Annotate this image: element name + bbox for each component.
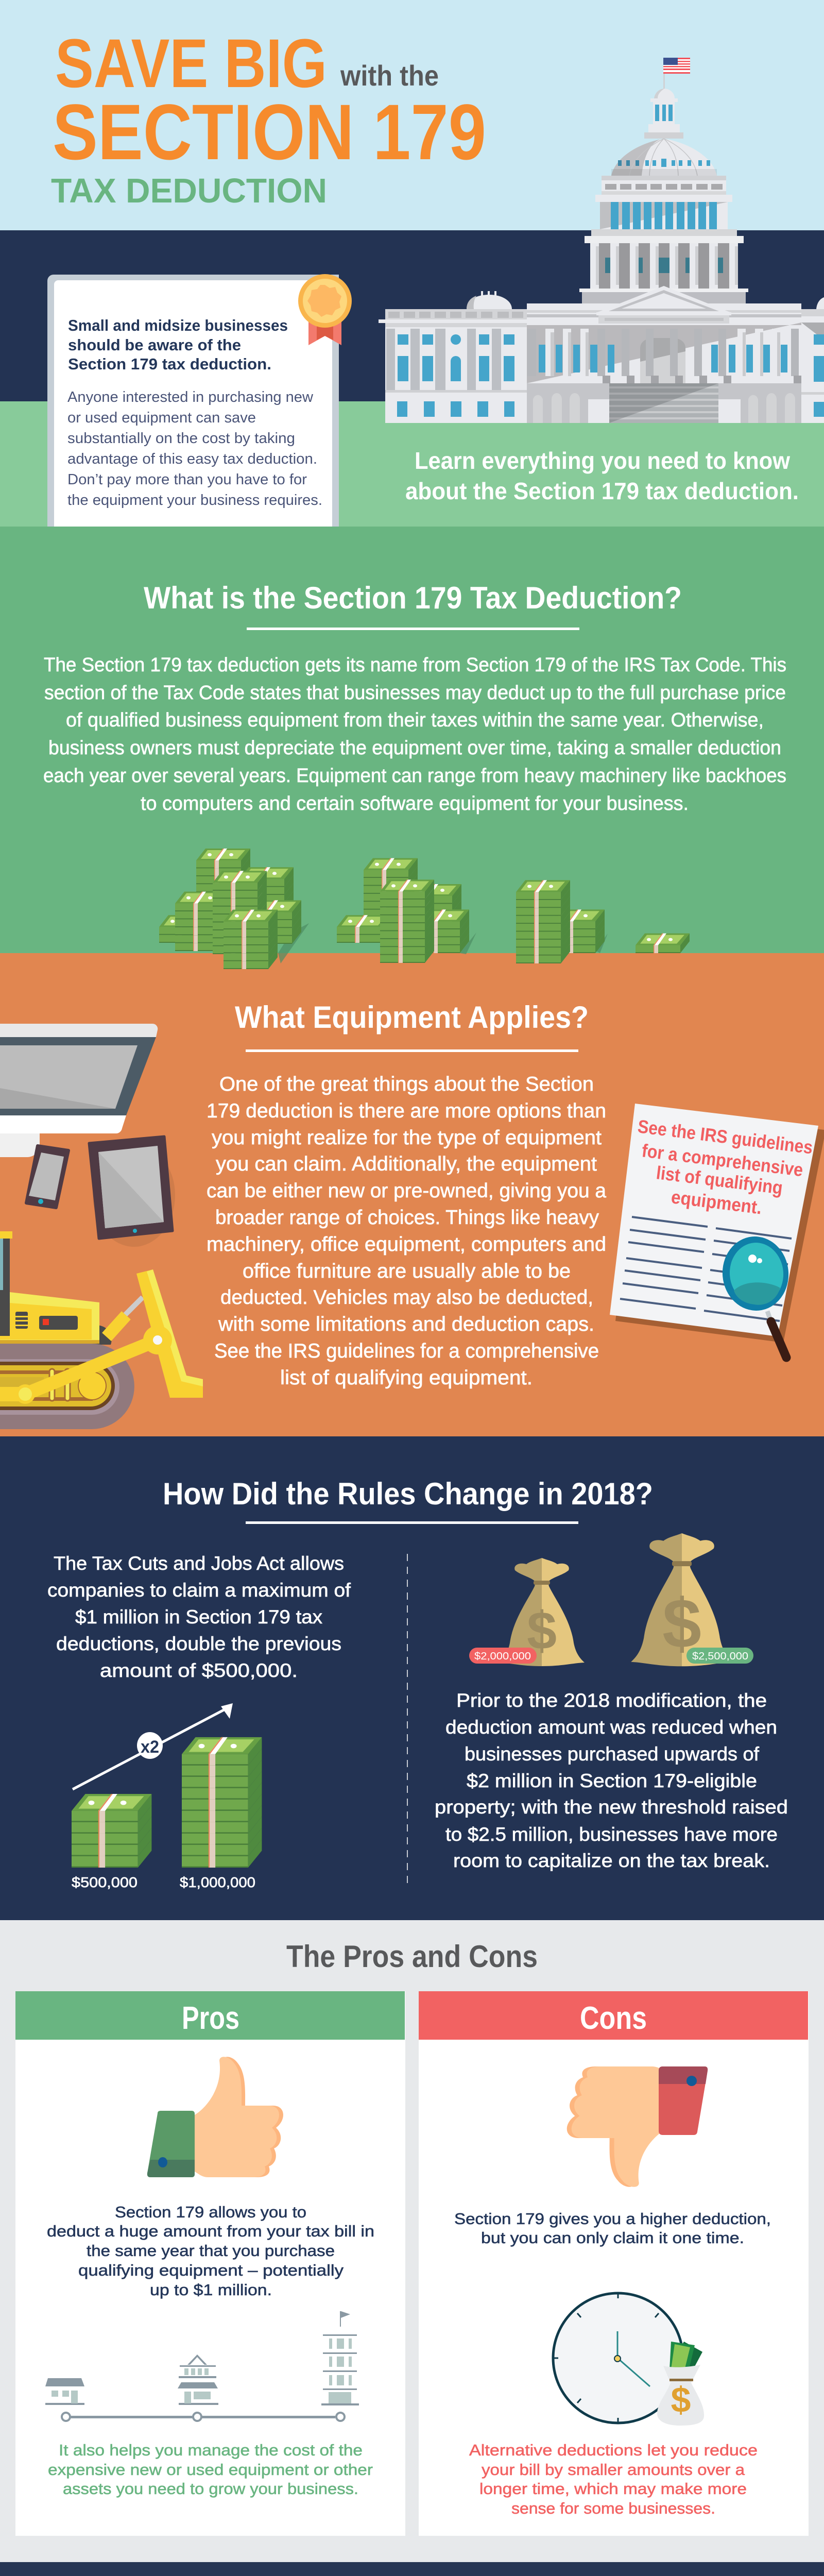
card body text <box>67 389 322 509</box>
chart: doubling cash stacks: $1,000,000 <box>180 1874 255 1890</box>
text: left paragraph: deductions, double the previous <box>56 1633 341 1654</box>
panel: how did the rules change <box>0 1436 824 1920</box>
paragraph: section of the Tax Code states that businesses may deduct up to the full purchase price <box>44 682 786 704</box>
hero tagline <box>405 447 799 504</box>
paragraph <box>207 1073 606 1389</box>
text: cons secondary: longer time, which may make more <box>479 2480 747 2498</box>
text: left paragraph: amount of $500,000. <box>100 1660 298 1681</box>
text: cons secondary: sense for some businesses. <box>511 2499 715 2517</box>
paragraph: with some limitations and deduction caps. <box>218 1313 594 1335</box>
icon: bulldozer <box>0 1231 203 1429</box>
callout: IRS guidelines document: list of qualifying <box>655 1162 784 1198</box>
x2 badge <box>137 1732 163 1759</box>
icon: tablet <box>89 1137 175 1247</box>
text: right paragraph: property; with the new threshold raised <box>435 1797 788 1818</box>
text: pros main <box>47 2203 374 2299</box>
panel: intro card <box>47 274 352 527</box>
icon: large money bag: $ <box>662 1584 701 1663</box>
paragraph: each year over several years. Equipment can range from heavy machinery like backhoes <box>43 765 786 787</box>
text: pros secondary: assets you need to grow your business. <box>63 2480 358 2498</box>
paragraph: See the IRS guidelines for a comprehensive <box>214 1340 599 1362</box>
icon: small money bag: $2,000,000 <box>474 1651 531 1662</box>
text: right paragraph: $2 million in Section 179-eligible <box>467 1770 757 1791</box>
card body text: Anyone interested in purchasing new <box>67 389 314 405</box>
text: right paragraph: businesses purchased upwards of <box>465 1743 760 1765</box>
icon: thumbs up <box>147 2057 283 2177</box>
text: cons main <box>454 2210 771 2247</box>
panel: financing <box>0 2562 824 2576</box>
card body text: the equipment your business requires. <box>67 492 322 509</box>
text: left paragraph: companies to claim a maximum of <box>47 1580 351 1601</box>
paragraph: to computers and certain software equipment for your business. <box>141 793 689 815</box>
card body text: substantially on the cost by taking <box>67 430 295 447</box>
paragraph: business owners must depreciate the equipment over time, taking a smaller deduction <box>48 737 781 759</box>
panel: cons: Cons <box>580 2001 647 2036</box>
text: left paragraph <box>47 1553 351 1681</box>
icon: large money bag: $2,500,000 <box>692 1651 748 1662</box>
text: cons secondary: your bill by smaller amounts over a <box>482 2461 745 2479</box>
text: pros main: up to $1 million. <box>150 2281 272 2299</box>
text: right paragraph: deduction amount was reduced when <box>445 1717 777 1738</box>
icon: award ribbon medal <box>298 274 352 345</box>
title: SAVE BIG <box>55 25 327 102</box>
text: left paragraph: $1 million in Section 179 tax <box>75 1606 323 1628</box>
heading: What Equipment Applies? <box>235 1000 589 1035</box>
text: cons secondary <box>469 2441 758 2517</box>
title: TAX DEDUCTION <box>51 172 327 210</box>
card heading: should be aware of the <box>68 336 241 354</box>
text: cons main: but you can only claim it one time. <box>481 2229 744 2247</box>
panel: hero light green band <box>0 401 824 527</box>
panel: hero navy band <box>0 230 824 401</box>
paragraph: can be either new or pre-owned, giving you a <box>207 1180 606 1202</box>
text: left paragraph: The Tax Cuts and Jobs Act allows <box>54 1553 344 1574</box>
paragraph: list of qualifying equipment. <box>280 1367 533 1389</box>
text: right paragraph: to $2.5 million, businesses have more <box>445 1824 778 1845</box>
paragraph: One of the great things about the Section <box>219 1073 594 1095</box>
heading: What is the Section 179 Tax Deduction? <box>144 581 682 615</box>
arrow <box>73 1703 233 1789</box>
card body text: advantage of this easy tax deduction. <box>67 451 317 467</box>
title <box>51 25 486 210</box>
text: pros main: Section 179 allows you to <box>115 2203 306 2221</box>
text: right paragraph <box>435 1690 788 1871</box>
title: with the <box>340 59 439 92</box>
paragraph: you might realize for the type of equipment <box>212 1127 602 1149</box>
icon: thumbs down <box>567 2066 708 2187</box>
heading: How Did the Rules Change in 2018? <box>163 1477 653 1511</box>
card body text: Don’t pay more than you have to for <box>67 471 307 488</box>
callout: IRS guidelines document: for a comprehensive <box>641 1140 804 1180</box>
text: pros main: qualifying equipment – potentially <box>78 2261 344 2279</box>
icon: magnifying glass <box>719 1234 792 1358</box>
icon: american flag <box>663 58 690 89</box>
icon: small money bag: $ <box>527 1601 557 1661</box>
x2 badge: x2 <box>141 1737 159 1757</box>
text: pros main: deduct a huge amount from your tax bill in <box>47 2222 374 2240</box>
card body text: or used equipment can save <box>67 410 256 426</box>
panel: what is section 179 <box>0 527 824 953</box>
icon: clock with money bag <box>553 2293 704 2426</box>
icon: business growth timeline <box>45 2311 359 2421</box>
panel: pros: Pros <box>182 2001 239 2036</box>
text: pros secondary: It also helps you manage the cost of the <box>59 2441 363 2459</box>
paragraph: machinery, office equipment, computers and <box>207 1233 606 1256</box>
illustration: US Capitol building <box>379 58 824 423</box>
callout: IRS guidelines document <box>610 1104 824 1358</box>
heading: The Pros and Cons <box>286 1939 538 1974</box>
text: cons main: Section 179 gives you a higher deduction, <box>454 2210 771 2228</box>
illustration: cash stacks <box>159 849 690 969</box>
right wing <box>801 297 824 423</box>
panel: cons <box>419 1991 809 2536</box>
title: SECTION 179 <box>53 88 486 176</box>
icon: clock with money bag: $ <box>671 2380 691 2420</box>
paragraph <box>43 654 786 815</box>
paragraph: office furniture are usually able to be <box>243 1260 571 1282</box>
card heading: Small and midsize businesses <box>68 316 288 334</box>
panel: hero sky background <box>0 0 824 230</box>
paragraph: you can claim. Additionally, the equipment <box>216 1153 597 1175</box>
panel: pros <box>15 1991 405 2536</box>
text: right paragraph: Prior to the 2018 modification, the <box>456 1690 767 1711</box>
chart: doubling cash stacks: $500,000 <box>72 1874 138 1890</box>
icon: small money bag <box>469 1558 585 1666</box>
hero tagline: Learn everything you need to know <box>415 447 790 474</box>
left wing <box>379 291 527 423</box>
text: pros main: the same year that you purchase <box>87 2242 335 2260</box>
panel: what equipment applies <box>0 953 824 1436</box>
hero tagline: about the Section 179 tax deduction. <box>405 478 799 504</box>
paragraph: of qualified business equipment from their taxes within the same year. Otherwise, <box>66 709 764 731</box>
center block <box>527 286 801 423</box>
card heading <box>68 316 288 373</box>
paragraph: broader range of choices. Things like heavy <box>215 1207 599 1229</box>
paragraph: 179 deduction is there are more options than <box>207 1100 606 1122</box>
chart: doubling cash stacks <box>72 1703 262 1890</box>
icon: smartphone <box>26 1146 68 1208</box>
panel: pros and cons <box>0 1920 824 2562</box>
icon: large money bag <box>631 1533 753 1666</box>
text: cons secondary: Alternative deductions let you reduce <box>469 2441 758 2459</box>
callout: IRS guidelines document: equipment. <box>670 1186 763 1218</box>
text: right paragraph: room to capitalize on the tax break. <box>453 1850 770 1871</box>
paragraph: deducted. Vehicles may also be deducted, <box>220 1286 593 1309</box>
text: pros secondary <box>48 2441 373 2498</box>
paragraph: The Section 179 tax deduction gets its name from Section 179 of the IRS Tax Code. This <box>44 654 786 676</box>
card heading: Section 179 tax deduction. <box>68 355 271 373</box>
text: pros secondary: expensive new or used equipment or other <box>48 2461 373 2479</box>
icon: desktop monitor <box>0 1024 158 1157</box>
